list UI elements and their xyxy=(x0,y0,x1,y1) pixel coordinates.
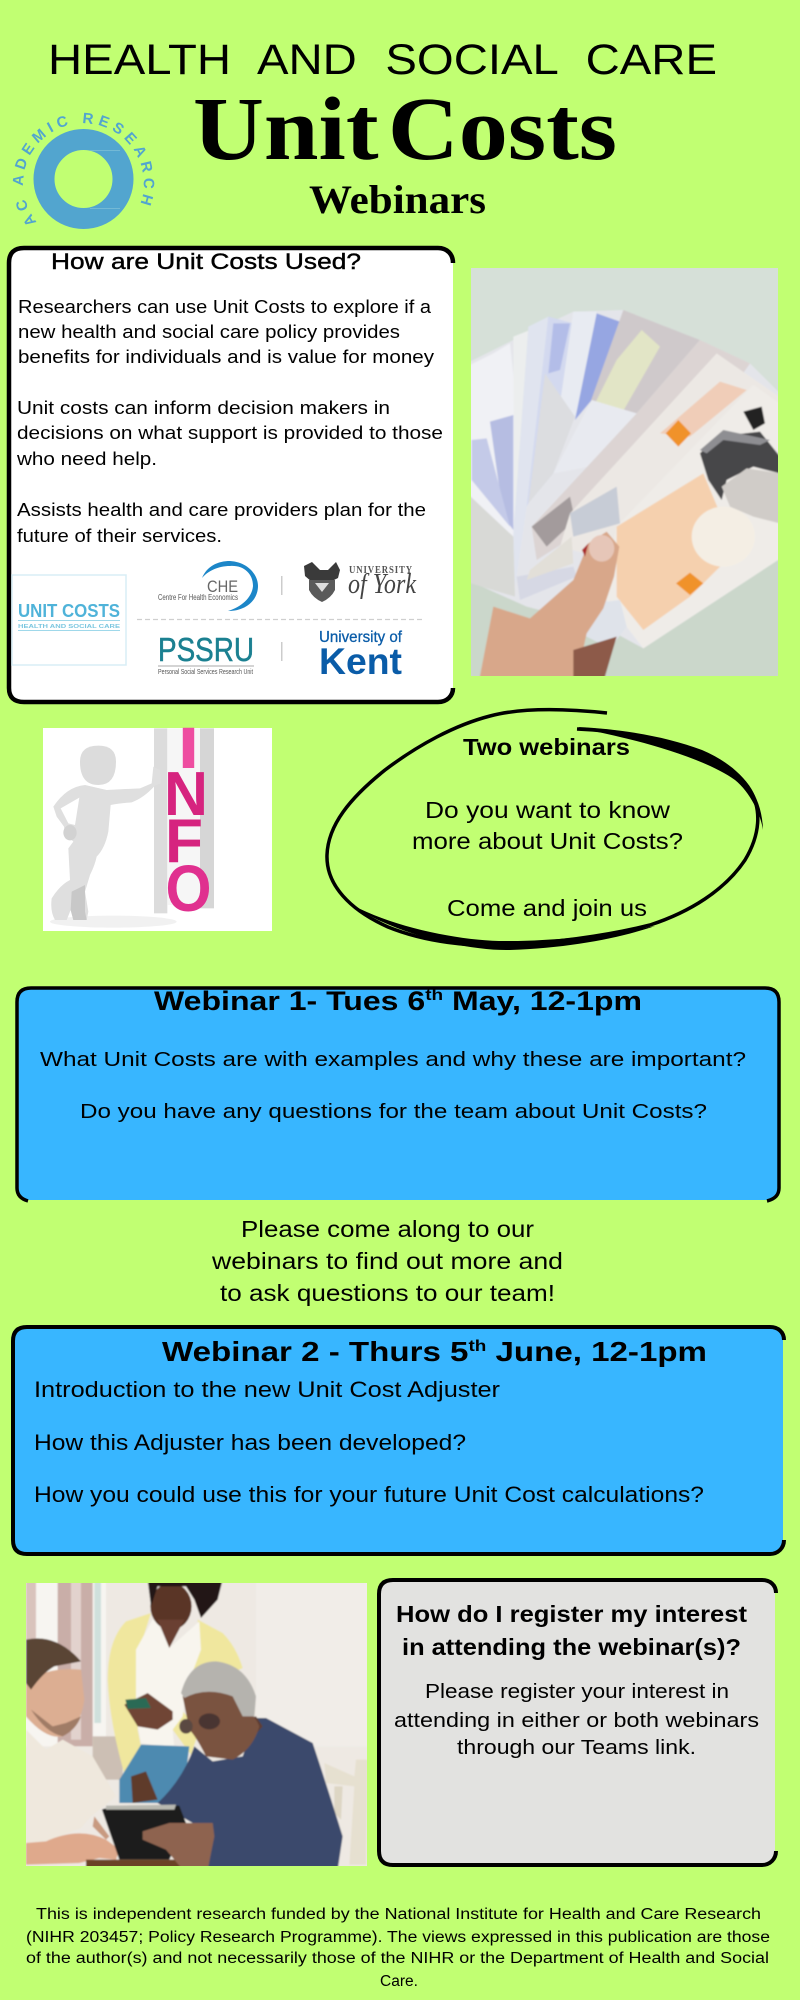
text block: come along xyxy=(211,1216,563,1306)
callout: hand drawn circle: Do you want to know xyxy=(425,797,670,823)
logo: university of york: of York xyxy=(348,569,416,600)
woman xyxy=(108,1613,151,1780)
text block: decision makers xyxy=(16,398,443,469)
logo: university of york: UNIVERSITY xyxy=(349,565,413,576)
figure xyxy=(51,746,161,920)
logo: university of york xyxy=(304,562,416,602)
info letters: F xyxy=(165,807,203,876)
topic lines xyxy=(40,1049,746,1123)
heading: How are Unit Costs Used? xyxy=(51,249,361,274)
topic lines: What Unit Costs are with examples and why these are important? xyxy=(40,1049,746,1071)
callout text: Two webinars xyxy=(463,734,630,760)
body text: attending in either or both webinars xyxy=(394,1709,759,1732)
callout: hand drawn circle: more about Unit Costs? xyxy=(412,828,683,854)
footer: funding disclaimer: Care. xyxy=(380,1973,418,1990)
logo: unit costs: HEALTH AND SOCIAL CARE xyxy=(18,624,121,630)
heading: in attending the webinar(s)? xyxy=(402,1634,741,1660)
young man xyxy=(26,1730,106,1780)
panel: webinar 1 xyxy=(16,986,779,1201)
heading: May, 12-1pm xyxy=(443,986,642,1016)
image: 3d figure leaning on info pillar xyxy=(43,716,272,931)
heading: June, 12-1pm xyxy=(486,1336,707,1367)
topic lines: Introduction to the new Unit Cost Adjuster xyxy=(34,1377,500,1402)
text block: providers xyxy=(17,500,426,546)
text block: come along: Please come along to our xyxy=(241,1216,534,1242)
heading xyxy=(396,1601,747,1660)
text block: decision makers: decisions on what support is provided to those xyxy=(17,423,443,443)
callout: hand drawn circle: Come and join us xyxy=(447,895,647,921)
logo: pssru: PSSRU xyxy=(158,631,254,668)
footer: funding disclaimer: (NIHR 203457; Policy Research Programme). The views expressed in this publication are those xyxy=(26,1929,770,1946)
logo: unit costs: UNIT COSTS xyxy=(18,601,120,621)
image: family with tablet xyxy=(23,1580,376,1873)
logo: academic research ring: AC ADEMIC RESEARCH xyxy=(12,112,154,224)
text block: researchers: Researchers can use Unit Costs to explore if a xyxy=(18,297,432,317)
heading: th xyxy=(425,987,443,1004)
text block: providers: future of their services. xyxy=(17,526,222,546)
footer: funding disclaimer xyxy=(26,1906,770,1990)
heading: Webinar 2 - Thurs 5 xyxy=(162,1336,421,1367)
footer: funding disclaimer: This is independent research funded by the National Institute for Health and Care Research xyxy=(36,1906,761,1923)
topic lines: Do you have any questions for the team about Unit Costs? xyxy=(80,1101,707,1123)
panel: register interest xyxy=(379,1580,776,1865)
logo: unit costs xyxy=(12,575,126,665)
text block: decision makers: who need help. xyxy=(16,449,157,469)
older man xyxy=(158,1718,343,1870)
subtitle: webinars: Webinars xyxy=(309,177,486,222)
heading: How do I register my interest xyxy=(396,1601,747,1627)
title: unit costs: Unit Costs xyxy=(193,80,617,179)
body text: Please register your interest in xyxy=(425,1680,729,1703)
info letters: I xyxy=(178,716,200,781)
text block: researchers: benefits for individuals and is value for money xyxy=(18,347,434,367)
logo: centre for health economics xyxy=(158,561,258,611)
text block: come along: to ask questions to our team! xyxy=(220,1280,555,1306)
chair xyxy=(324,1760,368,1865)
logo: centre for health economics: Centre For Health Economics xyxy=(158,593,238,602)
logo: centre for health economics: CHE xyxy=(207,577,238,596)
panel: webinar 2 xyxy=(13,1327,784,1554)
body text: through our Teams link. xyxy=(457,1736,696,1759)
heading: Webinar 1- Tues 6 xyxy=(154,986,383,1016)
text block: providers: Assists health and care providers plan for the xyxy=(17,500,426,520)
info letters: N xyxy=(164,760,208,829)
logo: university of kent: Kent xyxy=(319,641,402,682)
callout: hand drawn circle xyxy=(327,710,763,950)
heading: th xyxy=(468,1338,486,1355)
text block: decision makers: Unit costs can inform decision makers in xyxy=(17,398,390,418)
text block: researchers xyxy=(18,297,434,367)
logo: university of kent: University of xyxy=(319,629,403,646)
panel: how are unit costs used xyxy=(9,248,453,702)
topic lines: How you could use this for your future Unit Cost calculations? xyxy=(34,1482,704,1507)
text block: researchers: new health and social care policy provides xyxy=(18,322,400,342)
topic lines xyxy=(34,1377,704,1507)
footer: funding disclaimer: of the author(s) and not necessarily those of the NIHR or the Department of Health and Social xyxy=(26,1950,769,1967)
info letters: O xyxy=(166,851,212,925)
text block: come along: webinars to find out more and xyxy=(211,1248,563,1274)
logo: pssru: Personal Social Services Research Unit xyxy=(158,667,254,676)
topic lines: How this Adjuster has been developed? xyxy=(34,1430,466,1455)
image: hand holding banknotes xyxy=(471,268,778,676)
info letters xyxy=(164,716,212,925)
body text xyxy=(394,1680,759,1759)
title: health and social care: HEALTH AND SOCIAL CARE xyxy=(48,36,717,84)
